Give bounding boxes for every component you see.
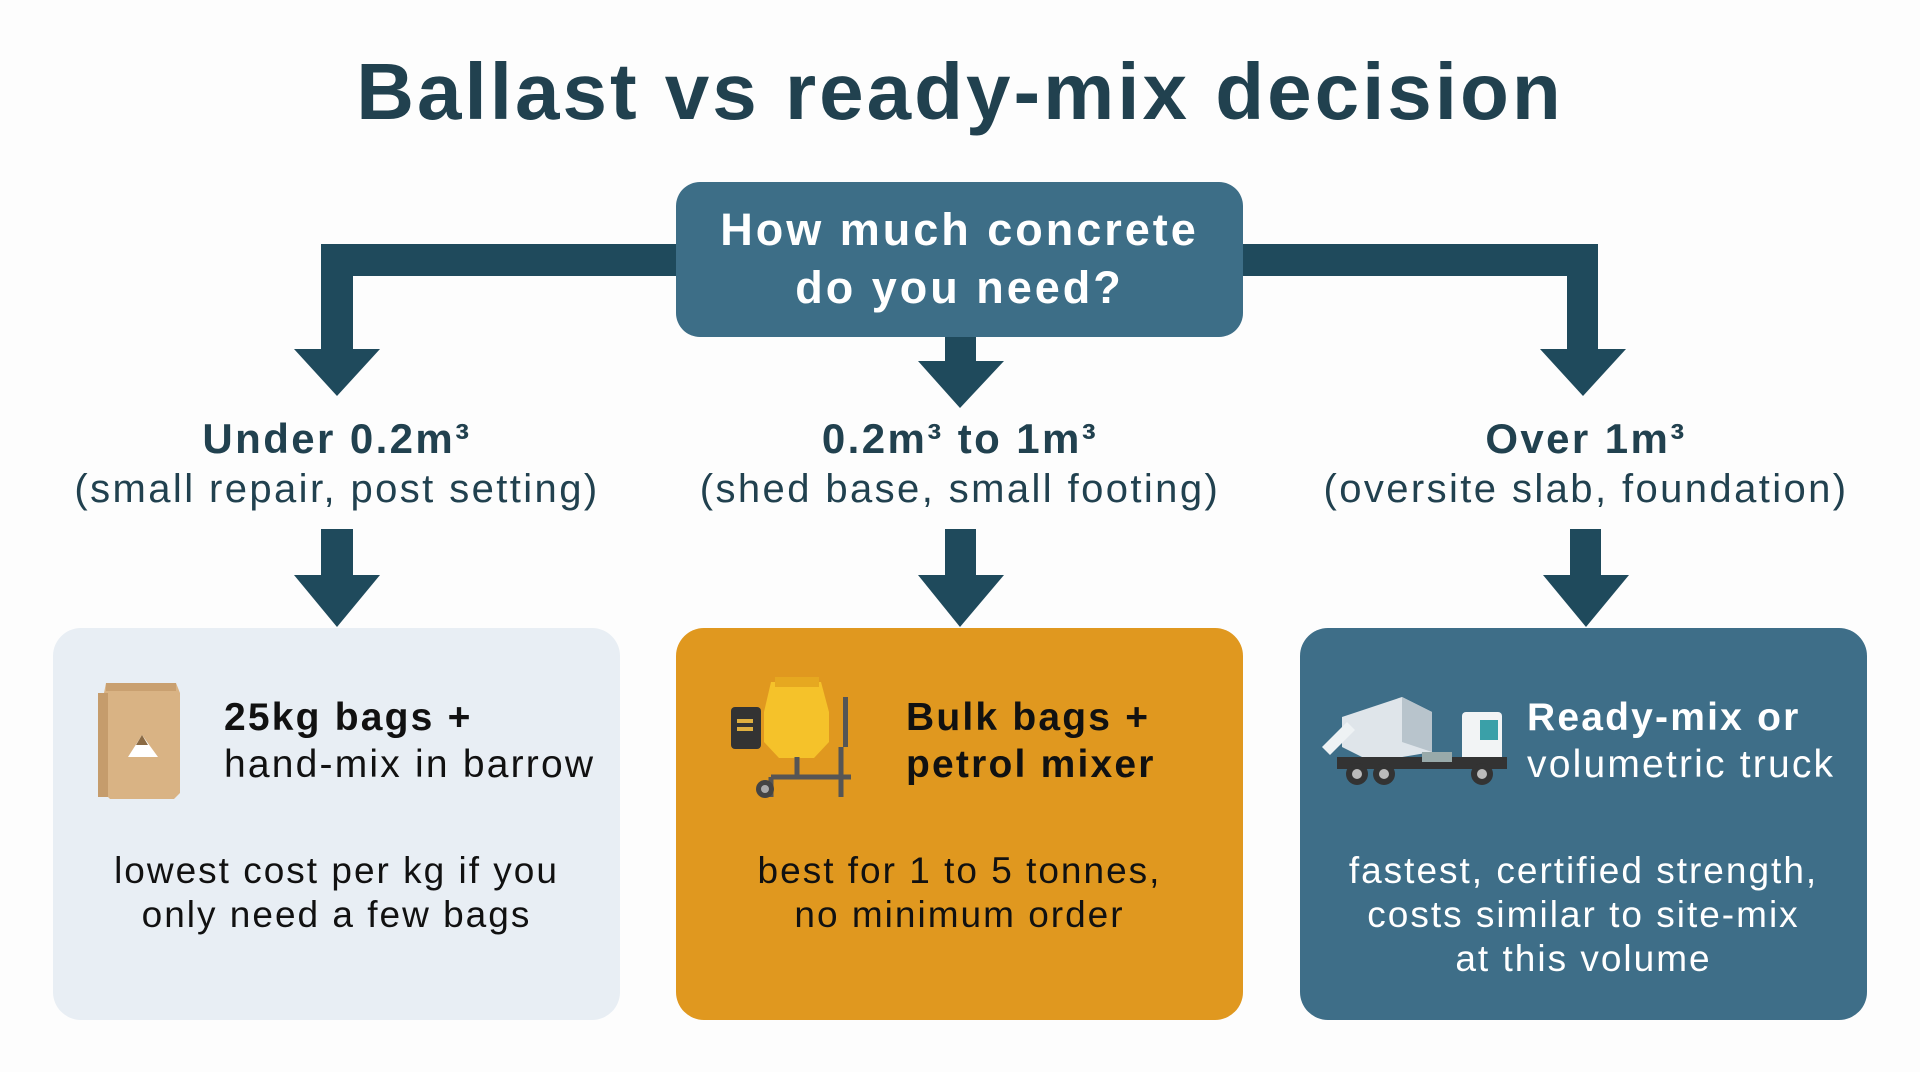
label: over 1: (oversite slab, foundation) bbox=[1323, 467, 1849, 511]
label: 0.2 to 1: 0.2m³ to 1m³ bbox=[822, 415, 1098, 462]
panel: truck: fastest, certified strength, bbox=[1349, 850, 1818, 891]
panel: truck: costs similar to site-mix bbox=[1367, 894, 1800, 935]
panel: truck bbox=[1300, 628, 1867, 1020]
label: 0.2 to 1 bbox=[700, 415, 1220, 511]
panel: bags bbox=[53, 628, 620, 1020]
panel: bags: only need a few bags bbox=[142, 894, 531, 935]
panel: truck: at this volume bbox=[1455, 938, 1712, 979]
icon: mixer bbox=[731, 677, 851, 798]
label: 0.2 to 1: (shed base, small footing) bbox=[700, 467, 1220, 511]
panel: bags: lowest cost per kg if you bbox=[114, 850, 559, 891]
label: under 0.2: (small repair, post setting) bbox=[74, 467, 600, 511]
panel: mixer: petrol mixer bbox=[906, 743, 1156, 786]
question box bbox=[676, 182, 1243, 337]
icon: bag bbox=[98, 683, 180, 799]
panel: truck: Ready-mix or bbox=[1527, 696, 1800, 739]
question box: How much concrete bbox=[720, 204, 1199, 255]
icon: truck bbox=[1322, 697, 1507, 785]
panel: bags: 25kg bags + bbox=[224, 696, 473, 739]
question box: do you need? bbox=[795, 262, 1124, 313]
panel: mixer: best for 1 to 5 tonnes, bbox=[758, 850, 1161, 891]
label: under 0.2 bbox=[74, 415, 600, 511]
panel: truck: volumetric truck bbox=[1527, 743, 1835, 786]
label: over 1 bbox=[1323, 415, 1849, 511]
title: Ballast vs ready-mix decision bbox=[356, 47, 1564, 136]
panel: bags: hand-mix in barrow bbox=[224, 743, 595, 786]
label: over 1: Over 1m³ bbox=[1485, 415, 1687, 462]
panel: mixer bbox=[676, 628, 1243, 1020]
label: under 0.2: Under 0.2m³ bbox=[202, 415, 472, 462]
panel: mixer: Bulk bags + bbox=[906, 696, 1150, 739]
panel: mixer: no minimum order bbox=[794, 894, 1125, 935]
